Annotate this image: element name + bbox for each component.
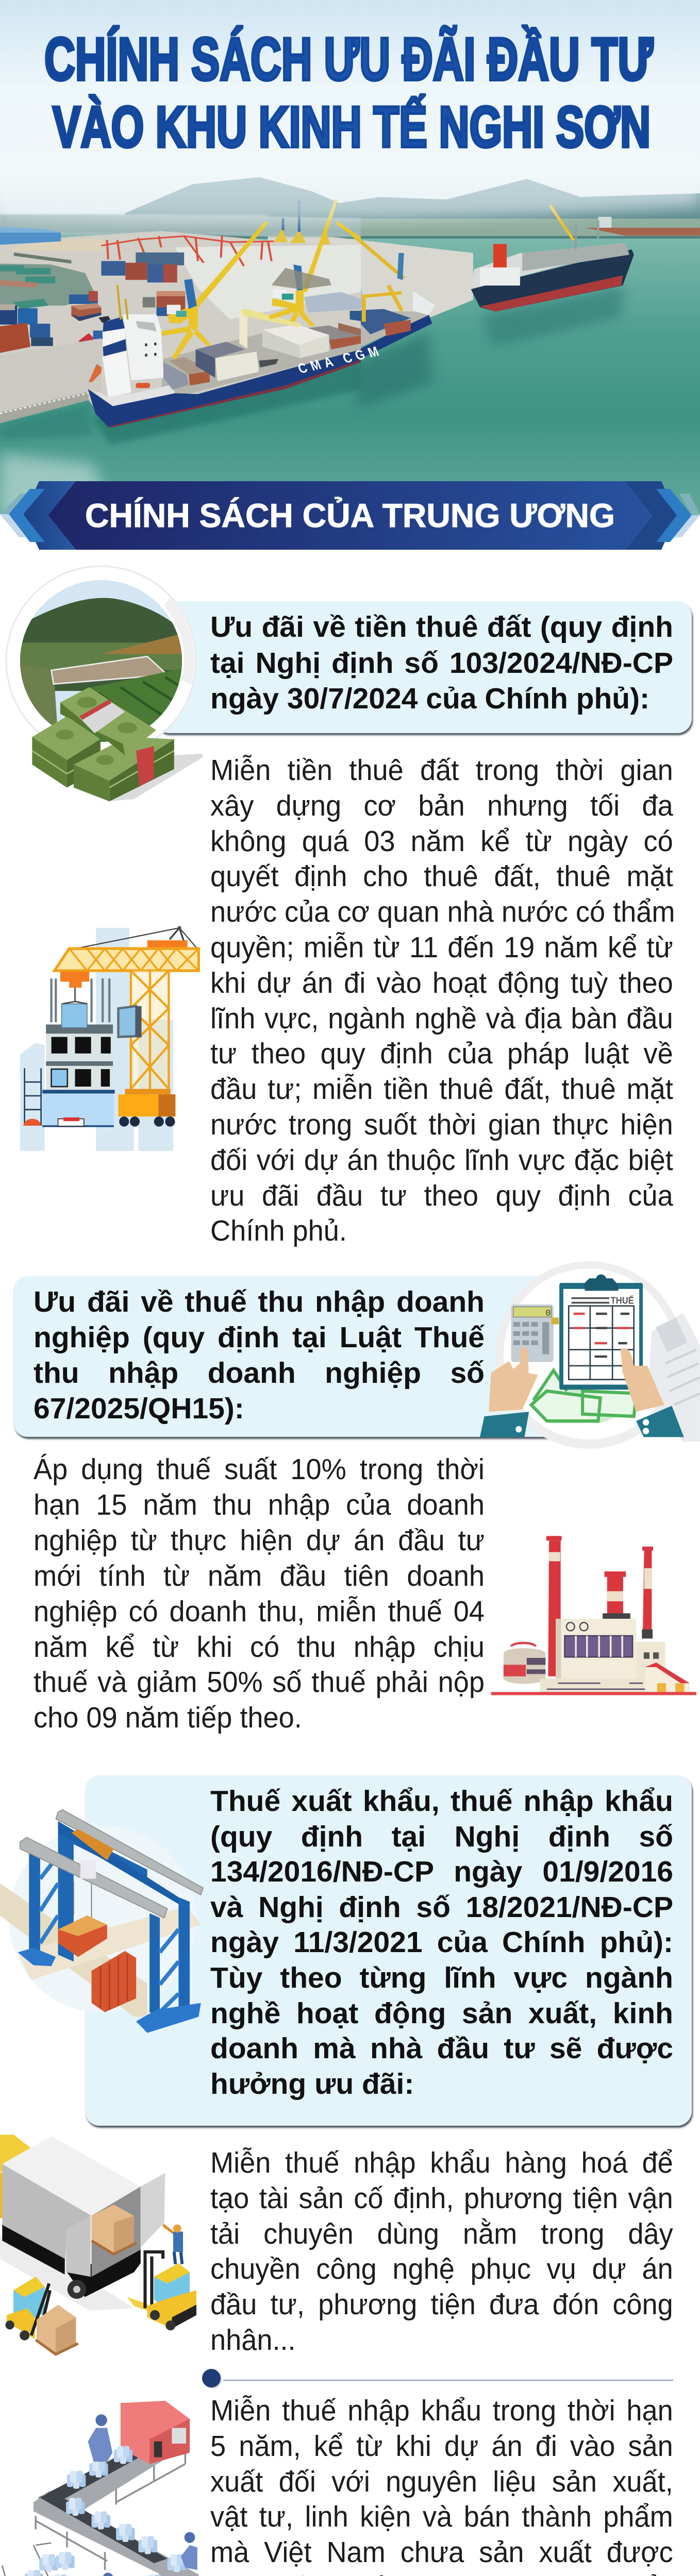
- text: land rent body: lĩnh vực, ngành nghề và địa bàn đầu: [210, 1002, 673, 1035]
- containers: [163, 362, 189, 390]
- panel: land rent header box: [155, 601, 692, 733]
- text: land rent body: quyền; miễn từ 11 đến 19 năm kể từ: [210, 931, 673, 964]
- text: land rent body: nước trong suốt thời gian thực hiện: [210, 1108, 673, 1141]
- text: corporate tax body: năm kể từ khi có thu nhập chịu: [34, 1631, 485, 1664]
- text: corporate tax body: Áp dụng thuế suất 10% trong thời: [34, 1453, 485, 1486]
- text: land rent body: Miễn tiền thuê đất trong thời gian: [210, 754, 673, 787]
- text: import duty body one: đầu tư, phương tiện đưa đón công: [210, 2288, 673, 2321]
- deck: [161, 331, 361, 395]
- text: import duty body two: 5 năm, kể từ khi dự án đi vào sản: [210, 2430, 673, 2463]
- hero photo: Nghi Son port with ships: [0, 0, 700, 514]
- text: corporate tax body: hạn 15 năm thu nhập của doanh: [34, 1488, 485, 1521]
- text: import export tax heading: Thuế xuất khẩu, thuế nhập khẩu: [210, 1785, 673, 1818]
- text: import export tax heading: (quy định tại Nghị định số: [210, 1820, 673, 1853]
- icon: factory: [491, 1536, 696, 1695]
- text: land rent body: ưu đãi đầu tư theo quy định của: [210, 1179, 673, 1212]
- text: import duty body one: tải chuyên dùng nằm trong dây: [210, 2217, 673, 2250]
- icon: production conveyor line: [2, 2401, 199, 2576]
- left half, drawn in close-up coordinates: [0, 199, 385, 445]
- text: import export tax heading: ngày 11/3/2021 của Chính phủ):: [210, 1926, 673, 1959]
- icon: land plot and money: [5, 566, 203, 802]
- hull: [88, 349, 361, 427]
- text: land rent heading: ngày 30/7/2024 của Chính phủ):: [210, 682, 649, 715]
- text: land rent body: quyết định cho thuê đất, thuê mặt: [210, 860, 673, 893]
- panel: import export tax header box: [85, 1775, 692, 2126]
- text: import duty body two: [210, 2394, 673, 2576]
- text: import export tax heading: nghề hoạt động sản xuất, kinh: [210, 1997, 673, 2030]
- text: corporate tax heading: [34, 1285, 485, 1425]
- text: land rent body: đối với dự án thuộc lĩnh vực đặc biệt: [210, 1144, 673, 1177]
- text: import export tax heading: hưởng ưu đãi:: [210, 2067, 414, 2100]
- text: land rent body: nước của cơ quan nhà nước có thẩm: [210, 895, 675, 928]
- right half, drawn in overview coordinates: [0, 177, 700, 409]
- text: land rent heading: tại Nghị định số 103/2024/NĐ-CP: [210, 647, 673, 680]
- text: land rent body: khi dự án đi vào hoạt động tuỳ theo: [210, 967, 673, 999]
- text: corporate tax heading: 67/2025/QH15):: [34, 1392, 244, 1425]
- text: import duty body two: mà Việt Nam chưa sản xuất được: [210, 2536, 673, 2569]
- text: corporate tax body: cho 09 năm tiếp theo.: [34, 1701, 302, 1734]
- icon: container gantry crane: [0, 1809, 204, 2033]
- text: import duty body two: xuất đối với nguyên liệu sản xuất,: [210, 2465, 673, 2498]
- left half, drawn in close-up coordinates: CMA CGM: [295, 343, 385, 377]
- superstructure: [123, 314, 164, 380]
- text: land rent heading: Ưu đãi về tiền thuê đất (quy định: [210, 611, 673, 643]
- text: land rent body: không quá 03 năm kể từ ngày có: [210, 825, 673, 858]
- text: import duty body one: Miễn thuế nhập khẩu hàng hoá để: [210, 2146, 673, 2179]
- text: import duty body one: [210, 2146, 673, 2357]
- icon: tax form with calculator and hands: [480, 1261, 700, 1449]
- panel: corporate tax header box: [13, 1276, 575, 1437]
- text: corporate tax body: [34, 1453, 485, 1734]
- text: land rent body: Chính phủ.: [210, 1214, 347, 1247]
- text: corporate tax heading: thu nhập doanh nghiệp số: [34, 1357, 485, 1389]
- text: import export tax heading: và Nghị định số 18/2021/NĐ-CP: [210, 1891, 673, 1924]
- text: corporate tax body: thuế và giảm 50% số thuế phải nộp: [34, 1666, 485, 1699]
- icon: tax form with calculator and hands: 0: [545, 1308, 551, 1319]
- section banner: CHÍNH SÁCH CỦA TRUNG ƯƠNG: [85, 497, 615, 534]
- section banner: [0, 481, 700, 550]
- text: import export tax heading: 134/2016/NĐ-CP ngày 01/9/2016: [210, 1855, 673, 1888]
- text: land rent heading: [210, 611, 673, 715]
- text: import duty body two: vật tư, linh kiện và bán thành phẩm: [210, 2500, 673, 2533]
- icon: delivery truck and forklifts: [0, 2134, 197, 2356]
- divider with dot: [202, 2369, 673, 2388]
- text: corporate tax body: mới tính từ năm đầu tiên doanh: [34, 1560, 485, 1592]
- text: corporate tax heading: nghiệp (quy định tại Luật Thuế: [34, 1321, 485, 1354]
- text: import duty body one: tạo tài sản cố định, phương tiện vận: [210, 2182, 673, 2215]
- text: import export tax heading: [210, 1785, 673, 2100]
- text: import duty body one: nhân...: [210, 2324, 296, 2357]
- text: import duty body two: Miễn thuế nhập khẩu trong thời hạn: [210, 2394, 673, 2427]
- title: [44, 24, 655, 157]
- text: land rent body: tư theo quy định của pháp luật về: [210, 1037, 673, 1070]
- text: land rent body: đầu tư; miễn tiền thuê đất, thuê mặt: [210, 1073, 673, 1106]
- text: land rent body: [210, 754, 675, 1247]
- text: corporate tax heading: Ưu đãi về thuế thu nhập doanh: [34, 1285, 485, 1318]
- text: import export tax heading: doanh mà nhà đầu tư sẽ được: [210, 2032, 673, 2065]
- text: corporate tax body: nghiệp từ thực hiện dự án đầu tư: [34, 1524, 485, 1557]
- icon: tower crane and building: [20, 926, 200, 1151]
- cranes: [239, 311, 247, 349]
- text: import export tax heading: Tùy theo từng lĩnh vực ngành: [210, 1961, 673, 1994]
- icon: tax form with calculator and hands: THUẾ: [611, 1295, 634, 1306]
- text: import duty body one: chuyền công nghệ phục vụ dự án: [210, 2252, 673, 2285]
- text: corporate tax body: nghiệp có doanh thu, miễn thuế 04: [34, 1595, 485, 1628]
- text: land rent body: xây dựng cơ bản nhưng tối đa: [210, 789, 673, 822]
